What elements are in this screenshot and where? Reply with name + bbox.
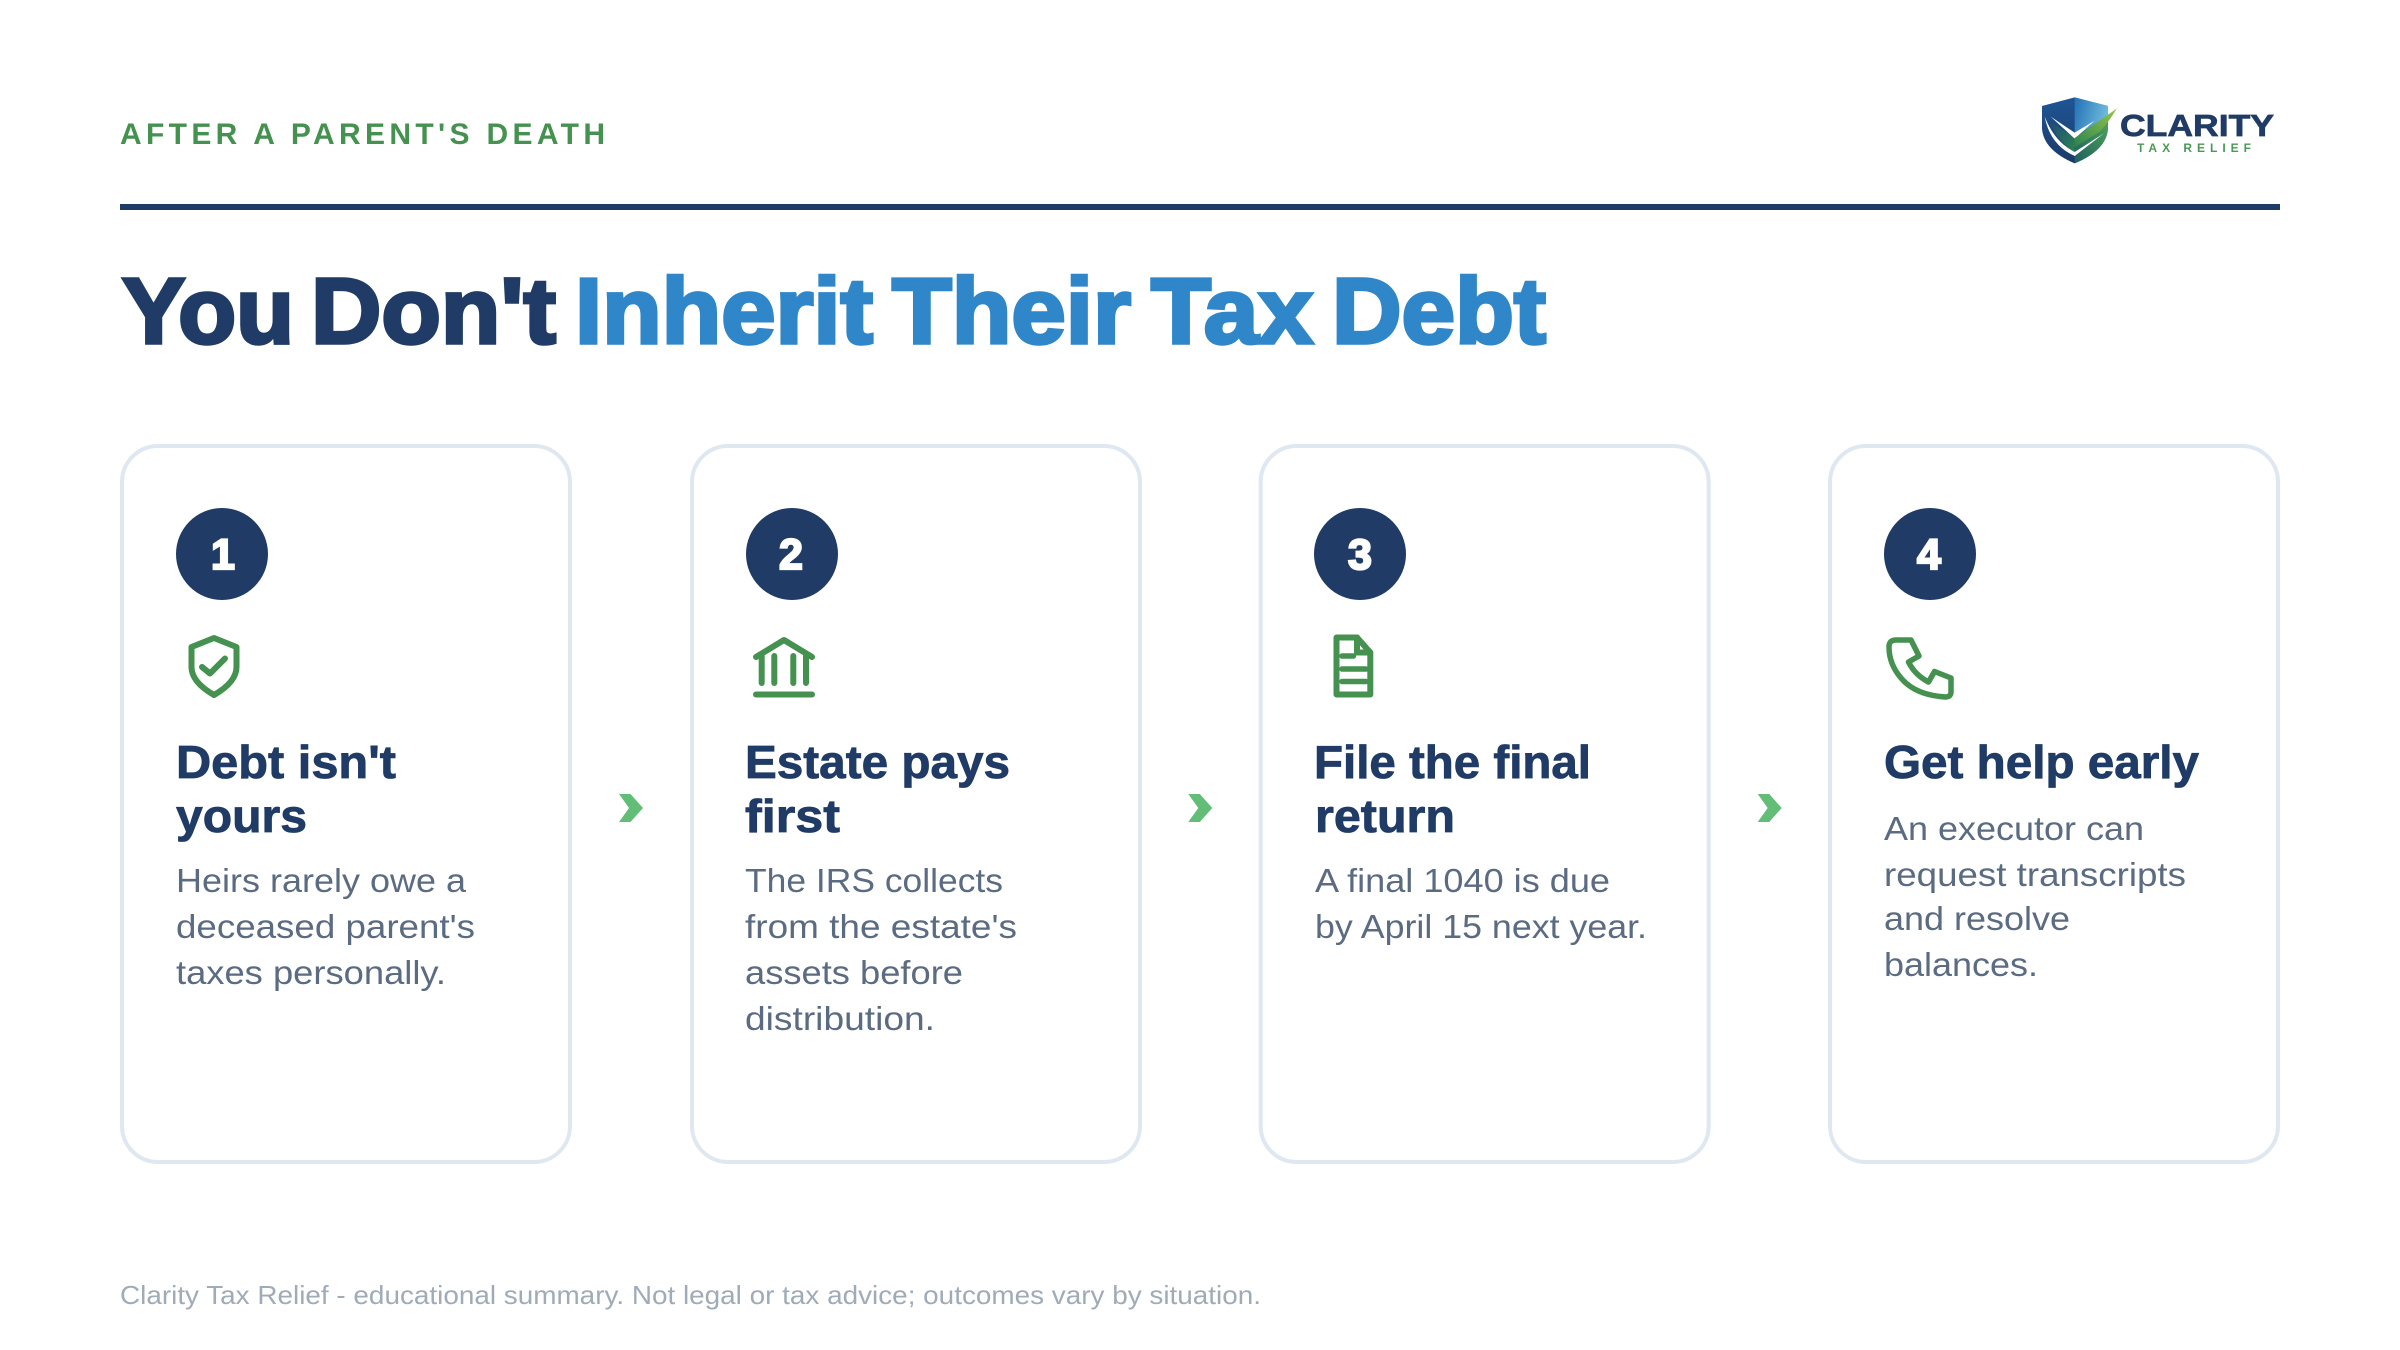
number badge 1: 1 bbox=[211, 531, 235, 579]
body text: and resolve bbox=[1884, 900, 2070, 937]
header rule bbox=[120, 204, 2280, 210]
arrow 2 bbox=[1188, 794, 1212, 822]
body text: from the estate's bbox=[745, 908, 1017, 945]
heading: Estate pays bbox=[745, 736, 1010, 788]
arrow 3 bbox=[1758, 794, 1782, 822]
title: navy part: You bbox=[122, 259, 294, 363]
number badge 4 bbox=[1884, 508, 1976, 600]
title bbox=[122, 259, 1546, 363]
heading: File the final bbox=[1314, 736, 1591, 788]
title: blue part: Tax bbox=[1151, 259, 1313, 363]
body text: taxes personally. bbox=[176, 954, 446, 991]
panel: step 3 bbox=[1261, 446, 1709, 1162]
panel: step 1 bbox=[122, 446, 570, 1162]
body text bbox=[1315, 862, 1647, 945]
heading: yours bbox=[176, 790, 307, 842]
eyebrow: AFTER A PARENT'S DEATH bbox=[120, 118, 605, 151]
icon: shield check bbox=[192, 638, 236, 695]
number badge 3 bbox=[1314, 508, 1406, 600]
icon: logo shield bbox=[2042, 97, 2117, 163]
heading bbox=[176, 736, 396, 842]
icon: phone bbox=[1889, 640, 1951, 697]
logo wordmark: CLARITY bbox=[2120, 108, 2274, 143]
heading: return bbox=[1315, 790, 1455, 842]
title: navy part: Don't bbox=[311, 259, 556, 363]
logo: Clarity Tax Relief bbox=[2042, 97, 2274, 163]
heading bbox=[745, 736, 1010, 842]
body text: An executor can bbox=[1884, 810, 2144, 847]
number badge 1 bbox=[176, 508, 268, 600]
number badge 2: 2 bbox=[779, 531, 803, 579]
title: navy part bbox=[122, 259, 556, 363]
icon: document bbox=[1336, 638, 1370, 694]
body text: distribution. bbox=[745, 1000, 935, 1037]
heading: first bbox=[745, 790, 840, 842]
body text: A final 1040 is due bbox=[1315, 862, 1610, 899]
number badge 2 bbox=[746, 508, 838, 600]
body text: by April 15 next year. bbox=[1315, 908, 1647, 945]
body text bbox=[176, 862, 475, 991]
body text bbox=[1884, 810, 2186, 983]
number badge 3: 3 bbox=[1348, 531, 1372, 579]
logo tagline: TAX RELIEF bbox=[2137, 141, 2251, 155]
panel: step 2 bbox=[692, 446, 1140, 1162]
body text: Heirs rarely owe a bbox=[176, 862, 467, 899]
title: blue part: Debt bbox=[1332, 259, 1546, 363]
body text: deceased parent's bbox=[176, 908, 475, 945]
heading: Get help early bbox=[1884, 736, 2199, 788]
body text: The IRS collects bbox=[745, 862, 1003, 899]
heading: Debt isn't bbox=[176, 736, 396, 788]
heading bbox=[1314, 736, 1591, 842]
title: blue part bbox=[575, 259, 1546, 363]
panel: step 4 bbox=[1830, 446, 2278, 1162]
body text: request transcripts bbox=[1884, 856, 2186, 893]
body text bbox=[745, 862, 1017, 1037]
body text: assets before bbox=[745, 954, 963, 991]
title: blue part: Inherit bbox=[575, 259, 873, 363]
number badge 4: 4 bbox=[1917, 531, 1941, 579]
title: blue part: Their bbox=[892, 259, 1131, 363]
arrow 1 bbox=[619, 794, 643, 822]
body text: balances. bbox=[1884, 946, 2038, 983]
footer note: Clarity Tax Relief - educational summary. Not legal or tax advice; outcomes vary by situation. bbox=[120, 1280, 1261, 1310]
icon: bank bbox=[756, 640, 812, 694]
